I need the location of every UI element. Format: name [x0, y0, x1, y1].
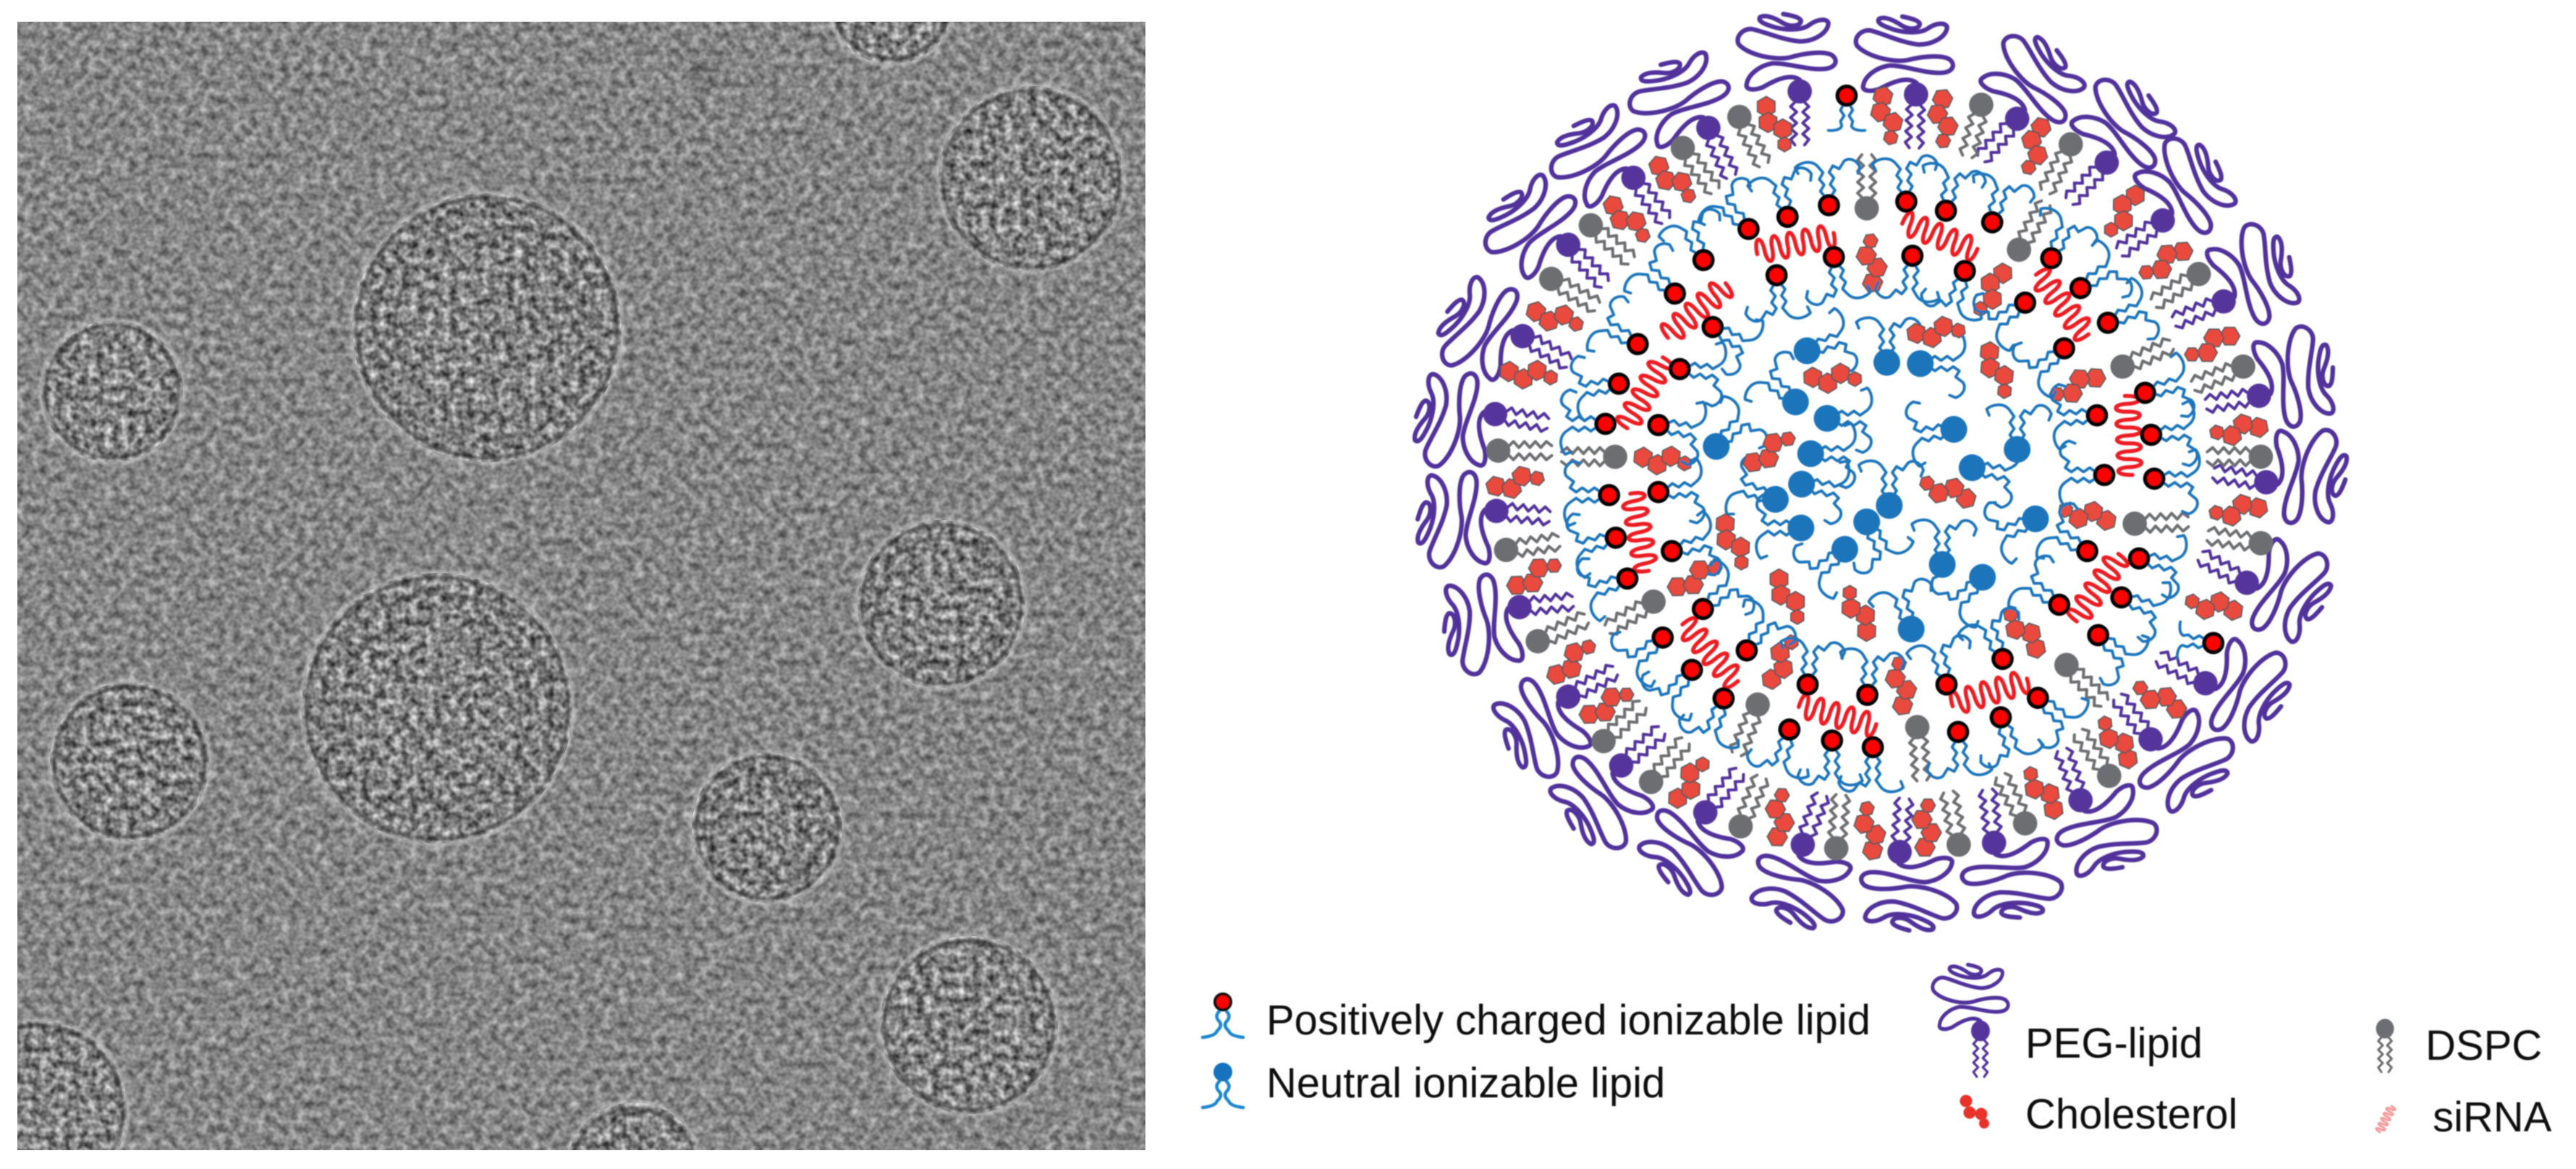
small dark spot in micrograph: [689, 59, 721, 90]
panel: cryo-EM micrograph of lipid nanoparticles: [17, 22, 1145, 1150]
PEG-lipid corona: [1408, 14, 2353, 939]
legend item: siRNA: [2376, 1094, 2552, 1141]
legend item: cholesterol: Cholesterol: [2025, 1091, 2237, 1138]
DSPC lipids: [1486, 90, 2274, 862]
neutral ionizable lipids in the core: [1685, 307, 2061, 652]
legend item: PEG-lipid: PEG-lipid: [2025, 1020, 2203, 1067]
legend item: siRNA: siRNA: [2433, 1094, 2552, 1141]
panel: lipid nanoparticle schematic: [1408, 14, 2353, 939]
siRNA strands: [1615, 211, 2142, 738]
positively charged ionizable lipids: [1561, 87, 2224, 792]
legend item: positively charged ionizable lipid: Positively charged ionizable lipid: [1266, 997, 1870, 1044]
legend item: neutral ionizable lipid: Neutral ionizable lipid: [1266, 1060, 1665, 1107]
legend item: PEG-lipid: [1933, 965, 2203, 1076]
legend: [1203, 965, 2552, 1141]
nanoparticle rings in micrograph: [17, 22, 1124, 1150]
legend item: DSPC: DSPC: [2425, 1022, 2542, 1069]
legend item: DSPC: [2376, 1019, 2542, 1072]
cholesterol molecules: [1484, 85, 2271, 862]
